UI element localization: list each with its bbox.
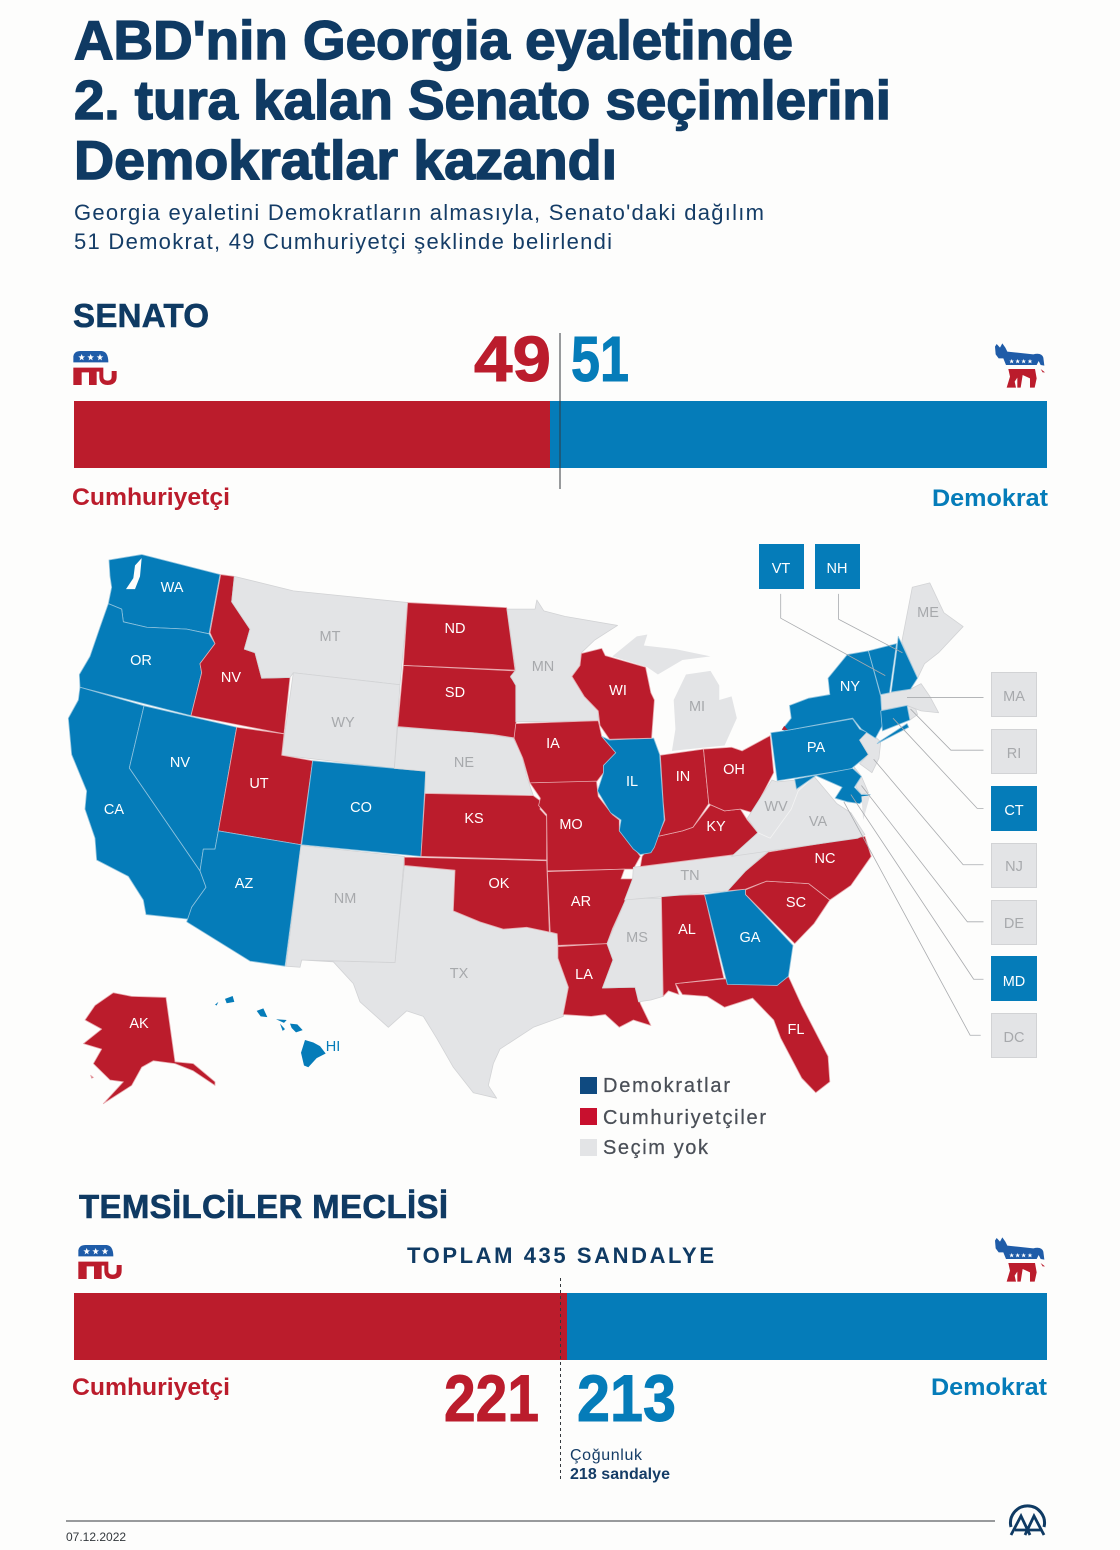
box: RI	[992, 730, 1036, 774]
state: Minnesota: MN	[532, 659, 554, 675]
state: Washington	[108, 555, 220, 634]
state: Maine: ME	[917, 605, 939, 621]
subtitle	[74, 200, 764, 254]
leader lines	[781, 594, 984, 1035]
box: NJ	[992, 844, 1036, 888]
state: Colorado	[302, 761, 426, 856]
state: Pennsylvania: PA	[807, 740, 825, 756]
state: Minnesota	[507, 600, 618, 722]
state: Wyoming: WY	[331, 715, 355, 731]
state: Oklahoma	[404, 857, 549, 932]
state: Alaska: AK	[129, 1016, 149, 1032]
state: New Mexico: NM	[334, 891, 356, 907]
state: Oregon	[79, 604, 215, 716]
number: Republican senate seats: 49	[474, 323, 551, 395]
state: Michigan: MI	[689, 699, 705, 715]
bar: Senate seats	[74, 333, 1047, 489]
icon: Democrat donkey (House)	[995, 1237, 1045, 1282]
note: majority threshold: Çoğunluk	[570, 1447, 643, 1464]
box: RI: RI	[1007, 746, 1021, 762]
number: Democrat house seats: 213	[577, 1361, 676, 1435]
state: South Dakota	[398, 665, 517, 738]
box: NH	[815, 544, 860, 589]
label: Demokrat: Demokrat	[932, 485, 1048, 512]
state: Kansas: KS	[464, 811, 484, 827]
state: New Hampshire	[891, 636, 918, 692]
state: Arkansas: AR	[571, 894, 591, 910]
state: Montana: MT	[320, 629, 341, 645]
state: Georgia	[705, 889, 793, 985]
subtitle: Georgia eyaletini Demokratların almasıyla, Senato'daki dağılım	[74, 200, 764, 225]
heading: Temsilciler Meclisi: TEMSİLCİLER MECLİSİ	[79, 1188, 448, 1225]
state: Arkansas	[547, 869, 633, 945]
state: Massachusetts	[881, 684, 939, 713]
subtitle: 51 Demokrat, 49 Cumhuriyetçi şeklinde belirlendi	[74, 229, 612, 254]
box: DC: DC	[1004, 1030, 1024, 1046]
state: Washington: WA	[161, 580, 184, 596]
state: Mississippi: MS	[626, 930, 648, 946]
state: Delaware	[854, 767, 868, 795]
state: Vermont	[868, 644, 896, 695]
state: Maryland	[795, 768, 870, 804]
state: New Mexico	[286, 845, 404, 967]
state: Nebraska: NE	[454, 755, 474, 771]
state: Erie triangle	[782, 726, 788, 730]
box: DE	[992, 900, 1036, 944]
bar: House seats	[74, 1278, 1047, 1480]
state: Iowa: IA	[546, 736, 560, 752]
state: Tennessee	[625, 851, 768, 900]
state: South Dakota: SD	[445, 685, 465, 701]
box: MD: MD	[1003, 974, 1025, 990]
box: VT: VT	[772, 561, 790, 577]
state: South Carolina: SC	[786, 895, 806, 911]
state: California: CA	[104, 802, 124, 818]
logo: AA	[1011, 1506, 1044, 1535]
state: New York	[782, 651, 909, 744]
state: Rhode Island	[907, 705, 918, 720]
state: Montana	[232, 576, 408, 685]
box: MA: MA	[1003, 689, 1025, 705]
state: Louisiana	[558, 944, 651, 1027]
note: majority threshold	[570, 1447, 670, 1483]
state: Utah: UT	[249, 776, 269, 792]
state: Arizona	[187, 831, 301, 966]
title: Demokratlar kazandı	[74, 129, 617, 191]
label: Demokrat (House): Demokrat	[931, 1374, 1047, 1401]
state: Illinois	[598, 736, 664, 855]
state: Virginia and West Virginia: WV	[764, 799, 788, 815]
state: Utah	[218, 727, 313, 845]
state: Alabama: AL	[678, 922, 696, 938]
box: NJ: NJ	[1005, 859, 1023, 875]
state: Kentucky	[640, 805, 758, 867]
state: Michigan	[612, 635, 737, 751]
box: DC	[992, 1014, 1036, 1058]
state: Tennessee: TN	[680, 868, 700, 884]
state: Hawaii: HI	[326, 1039, 340, 1055]
state: Florida	[675, 976, 830, 1093]
state: North Dakota	[403, 603, 515, 670]
box: CT	[991, 786, 1037, 831]
state: Louisiana: LA	[575, 967, 593, 983]
label: Cumhuriyetçi: Cumhuriyetçi	[72, 484, 230, 511]
map: US states senate results	[68, 544, 1037, 1104]
legend: Seçim yok	[603, 1137, 709, 1159]
legend	[580, 1075, 766, 1159]
state: Mississippi	[602, 898, 663, 1002]
legend: Demokratlar	[603, 1075, 730, 1097]
icon: Democrat donkey (Senate)	[995, 343, 1045, 388]
state: Pennsylvania	[771, 719, 868, 781]
state: Idaho	[191, 575, 290, 734]
box: VT	[759, 544, 804, 589]
state: Maine	[902, 583, 963, 678]
label: Cumhuriyetçi (House): Cumhuriyetçi	[72, 1374, 230, 1401]
title: 2. tura kalan Senato seçimlerini	[74, 69, 891, 131]
state: North Carolina	[727, 836, 871, 900]
state: Wisconsin	[572, 648, 654, 739]
number: Republican house seats: 221	[444, 1361, 539, 1435]
icon: Republican elephant (House)	[78, 1245, 122, 1279]
state: Connecticut	[881, 705, 910, 731]
state: Colorado: CO	[350, 800, 372, 816]
footer rule	[66, 1520, 995, 1522]
heading: Senato: SENATO	[73, 297, 209, 334]
state: Florida: FL	[788, 1022, 804, 1038]
state: Wyoming	[282, 673, 400, 768]
state: Texas: TX	[450, 966, 469, 982]
state: Virginia eastern shore	[861, 795, 870, 820]
date: 07.12.2022	[66, 1530, 126, 1544]
icon: Republican elephant (Senate)	[73, 351, 117, 385]
state: Virginia and West Virginia: VA	[809, 814, 827, 830]
title: ABD'nin Georgia eyaletinde	[74, 9, 793, 71]
text: total seats: TOPLAM 435 SANDALYE	[407, 1243, 714, 1268]
box: MA	[992, 672, 1036, 716]
state: Kansas	[421, 793, 547, 860]
state: Missouri	[530, 781, 640, 871]
state: North Carolina: NC	[815, 851, 835, 867]
state: Idaho: NV	[221, 670, 241, 686]
state: North Dakota: ND	[445, 621, 465, 637]
state: Nevada: NV	[170, 755, 190, 771]
note: majority threshold: 218 sandalye	[570, 1466, 670, 1483]
state: South Carolina	[746, 881, 830, 944]
state: Kentucky: KY	[706, 819, 726, 835]
state: Illinois: IL	[626, 774, 638, 790]
state: New Jersey	[860, 731, 881, 773]
state: California	[68, 687, 206, 919]
state: Indiana	[658, 749, 709, 836]
state: Ohio: OH	[723, 762, 745, 778]
state: Hawaii	[215, 996, 340, 1067]
state: Nebraska	[394, 727, 533, 796]
state: Iowa	[514, 721, 616, 783]
title	[74, 9, 891, 191]
state: Alaska	[83, 993, 215, 1104]
state: Missouri: MO	[559, 817, 583, 833]
box: DE: DE	[1004, 916, 1024, 932]
state: Georgia: GA	[740, 930, 761, 946]
state: Ohio	[704, 736, 774, 813]
state: Texas	[302, 865, 568, 1098]
state: Alabama	[661, 895, 724, 996]
state: Indiana: IN	[676, 769, 690, 785]
state: Virginia and West Virginia	[732, 776, 865, 856]
state: New York: NY	[840, 679, 860, 695]
state: Oklahoma: OK	[489, 876, 510, 892]
box: CT: CT	[1004, 803, 1024, 819]
state: Wisconsin: WI	[609, 683, 627, 699]
number: Democrat senate seats: 51	[571, 323, 629, 395]
box: MD	[991, 956, 1037, 1001]
state: Nevada	[129, 706, 237, 871]
state: Oregon: OR	[130, 653, 152, 669]
state: Arizona: AZ	[235, 876, 253, 892]
legend: Cumhuriyetçiler	[603, 1107, 766, 1129]
box: NH: NH	[827, 561, 847, 577]
